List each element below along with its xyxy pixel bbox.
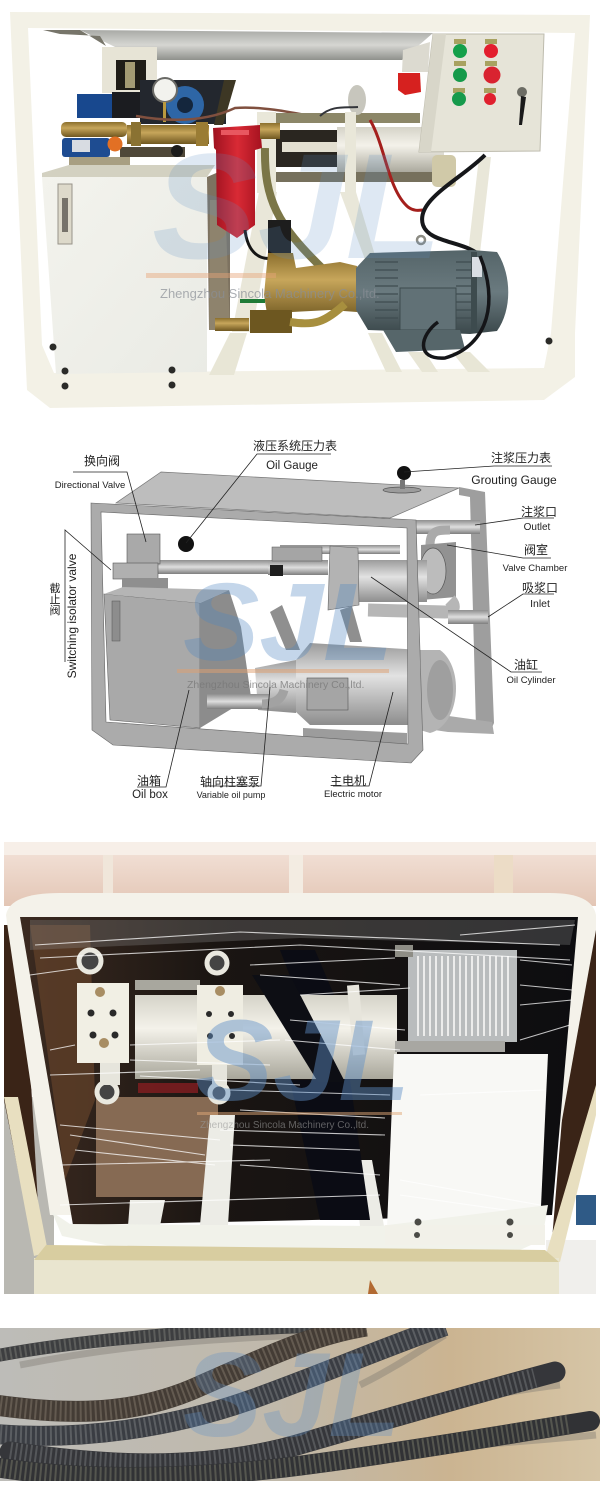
watermark: SJL xyxy=(195,997,410,1125)
label: electric motor: 主电机 xyxy=(330,774,366,788)
control box xyxy=(419,34,544,152)
cooler grille xyxy=(395,945,517,1052)
label: oil cylinder xyxy=(506,657,556,686)
pump pipe xyxy=(207,694,269,709)
blue valve block xyxy=(77,92,140,118)
concrete floor and surroundings xyxy=(4,1097,596,1294)
hose 2 xyxy=(0,1326,366,1411)
switching valve xyxy=(113,563,158,579)
label: directional valve: Directional Valve xyxy=(55,480,125,491)
label: valve chamber xyxy=(503,542,567,574)
white machine frame xyxy=(6,893,596,1215)
watermark: Zhengzhou Sincola Machinery Co.,ltd. xyxy=(187,679,364,691)
rotary switch handle xyxy=(517,87,527,125)
dark gaps beside frame xyxy=(4,925,596,1240)
watermark: Zhengzhou Sincola Machinery Co.,ltd. xyxy=(160,286,380,301)
label: oil gauge: 液压系统压力表 xyxy=(253,438,337,453)
inlet pipe xyxy=(368,600,453,612)
indicator buttons xyxy=(452,39,500,106)
directional valve xyxy=(62,136,122,157)
top plate xyxy=(116,472,459,518)
wooden side posts xyxy=(4,1085,596,1262)
concrete floor xyxy=(0,1328,600,1481)
red filter xyxy=(213,125,262,238)
white tank side xyxy=(387,1054,548,1228)
electric motor xyxy=(356,236,508,352)
directional valve xyxy=(127,534,160,564)
label: oil box: Oil box xyxy=(132,789,168,801)
upper grey haze xyxy=(30,920,575,950)
black diagonal struts xyxy=(280,950,370,1220)
hose 3 xyxy=(0,1326,445,1436)
rear bracket xyxy=(102,47,157,93)
olive pipes xyxy=(265,148,322,268)
oil level gauge xyxy=(58,184,72,244)
label: directional valve xyxy=(55,453,125,491)
label: oil cylinder: Oil Cylinder xyxy=(506,675,556,686)
label: oil cylinder: 油缸 xyxy=(514,657,538,672)
label: valve chamber: Valve Chamber xyxy=(503,563,567,574)
rear frame xyxy=(459,487,494,732)
machine drawing xyxy=(91,466,494,763)
label: outlet: Outlet xyxy=(524,522,551,533)
valve base xyxy=(69,157,130,170)
label: inlet: Inlet xyxy=(530,598,550,610)
pallet base xyxy=(34,1245,559,1294)
label: switching isolator valve: 止 xyxy=(50,593,60,606)
brass manifold xyxy=(61,122,209,157)
hose 1 xyxy=(0,1326,320,1356)
left brown patch xyxy=(30,925,95,1180)
rods xyxy=(280,545,400,554)
electric motor xyxy=(296,643,421,725)
hose 4 xyxy=(10,1372,555,1464)
red hose behind xyxy=(136,108,310,120)
label: oil gauge xyxy=(253,438,337,472)
label: oil gauge: Oil Gauge xyxy=(266,460,318,472)
label: variable oil pump: 轴向柱塞泵 xyxy=(200,774,260,789)
upper pipe assembly xyxy=(158,560,280,574)
motor skid xyxy=(303,728,407,745)
cooling fan with gauge xyxy=(140,78,236,125)
watermark: Zhengzhou Sincola Machinery Co.,ltd. xyxy=(200,1120,369,1131)
hydraulic pump xyxy=(215,253,357,333)
wooden crate back xyxy=(4,842,596,906)
label: grouting gauge: Grouting Gauge xyxy=(471,473,557,487)
label: directional valve: 换向阀 xyxy=(84,453,120,468)
panel: photo of rubber hoses xyxy=(0,1326,600,1481)
tank top xyxy=(42,165,215,177)
wrapped bottom frame xyxy=(52,1205,548,1250)
label: electric motor: Electric motor xyxy=(324,789,382,800)
label: outlet: 注浆口 xyxy=(521,504,557,519)
valve blocks xyxy=(77,983,243,1065)
label: grouting gauge xyxy=(471,450,557,487)
label: switching isolator valve: Switching isolator valve xyxy=(65,553,79,678)
panel: photo of machine wrapped in crate xyxy=(4,842,596,1294)
oil cylinder xyxy=(355,560,427,602)
panel: labelled diagram of pump components xyxy=(50,438,567,801)
red reflection xyxy=(138,1083,198,1093)
bolts xyxy=(414,1218,514,1238)
red plug xyxy=(398,42,430,95)
vertical plates and legs xyxy=(232,112,491,332)
label: oil box: 油箱 xyxy=(137,773,161,788)
hose shadows xyxy=(20,1335,596,1455)
label: inlet: 吸浆口 xyxy=(522,580,558,595)
lower white frame legs xyxy=(128,1115,384,1226)
white cylinder xyxy=(264,85,456,187)
cardboard box xyxy=(96,1097,218,1197)
valve block xyxy=(328,546,359,610)
leader lines xyxy=(65,454,554,787)
panel: photo of grouting pump front view xyxy=(10,12,590,408)
label: valve chamber: 阀室 xyxy=(524,542,548,557)
outlet pipe xyxy=(410,520,480,534)
watermark: SJL xyxy=(152,122,442,290)
plastic wrap streaks xyxy=(30,925,575,1215)
oil tank xyxy=(42,167,230,374)
black valve on pump xyxy=(268,220,291,253)
label: inlet xyxy=(522,580,558,610)
label: oil box xyxy=(132,773,168,801)
valve chamber xyxy=(421,542,456,600)
skid cross bars xyxy=(209,333,490,375)
oil box xyxy=(104,594,200,728)
white cylinder xyxy=(135,975,397,1082)
dark interior xyxy=(20,917,578,1225)
machine frame xyxy=(10,12,590,408)
top shelf xyxy=(43,30,433,60)
hose 5 xyxy=(0,1421,590,1477)
black gauges xyxy=(178,536,194,552)
motor power cable xyxy=(423,256,489,358)
front frame xyxy=(91,503,423,763)
label: grouting gauge: 注浆压力表 xyxy=(491,450,551,465)
label: electric motor xyxy=(324,774,382,800)
pipe elbows xyxy=(79,950,228,1102)
label: variable oil pump xyxy=(197,774,265,800)
label: switching isolator valve xyxy=(50,553,79,678)
struts xyxy=(270,605,300,650)
motor end bell xyxy=(420,650,456,733)
watermark: SJL xyxy=(183,1328,401,1462)
bolts xyxy=(50,338,552,390)
label: switching isolator valve: 截 xyxy=(50,581,60,595)
label: outlet xyxy=(521,504,557,533)
label: switching isolator valve: 阀 xyxy=(50,603,60,617)
variable pump xyxy=(255,660,296,713)
brass connector top xyxy=(260,123,280,139)
label: variable oil pump: Variable oil pump xyxy=(197,790,265,800)
watermark: SJL xyxy=(183,561,393,684)
cables xyxy=(245,107,485,260)
